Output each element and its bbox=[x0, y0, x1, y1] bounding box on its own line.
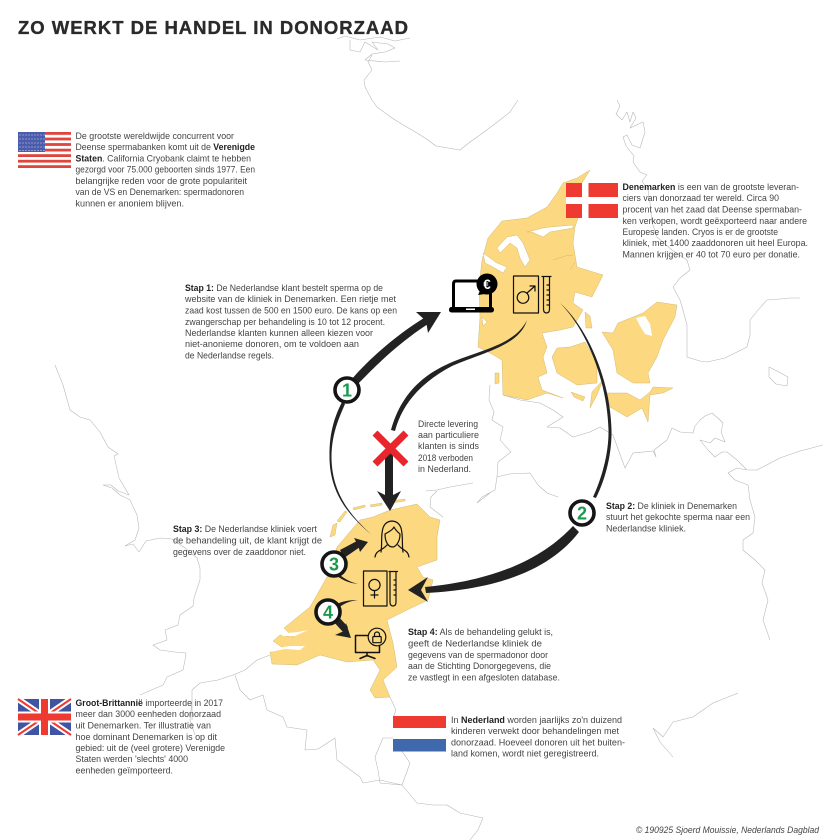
text: United States bbox=[76, 131, 255, 210]
text: step 4: ze vastlegt in een afgesloten database. bbox=[408, 672, 560, 684]
flag: Netherlands bbox=[393, 716, 446, 752]
text: step 4 bbox=[408, 627, 560, 684]
step 3 arrow bbox=[333, 538, 368, 584]
text: direct delivery ban bbox=[418, 419, 479, 475]
Jutland bbox=[478, 170, 603, 400]
text: direct delivery ban: in Nederland. bbox=[418, 464, 471, 475]
text: Netherlands bbox=[451, 715, 625, 760]
map: Denmark bbox=[478, 170, 677, 422]
text: step 2: Stap 2: De kliniek in Denemarken bbox=[606, 501, 737, 512]
text: Denmark: Europese landen. Cryos is er de grootste bbox=[622, 227, 778, 238]
text: step 1: Nederlandse klanten kunnen alleen kiezen voor bbox=[185, 328, 373, 339]
text: step 3 bbox=[173, 524, 322, 558]
text: United States: Staten. California Cryobank claimt te hebben bbox=[76, 154, 251, 164]
text: United States: De grootste wereldwijde concurrent voor bbox=[76, 131, 234, 142]
text: direct delivery ban: Directe levering bbox=[418, 419, 478, 430]
icon: laptop with euro bbox=[449, 274, 498, 312]
text: Denmark bbox=[622, 182, 808, 260]
text: step 2: Nederlandse kliniek. bbox=[606, 524, 686, 534]
text: United Kingdom: hoe dominant Denemarken is op dit bbox=[76, 732, 217, 743]
step 1 arrow bbox=[329, 312, 441, 535]
title: ZO WERKT DE HANDEL IN DONORZAAD bbox=[18, 17, 408, 38]
text: Denmark: ken verkopen, wordt geëxporteerd naar andere bbox=[622, 216, 807, 227]
text: Netherlands: kinderen verwekt door behandelingen met bbox=[451, 726, 619, 737]
text: United Kingdom: Groot-Brittannië importeerde in 2017 bbox=[76, 698, 223, 709]
text: United Kingdom: gebied: uit de (veel grotere) Verenigde bbox=[76, 743, 225, 754]
text: step 4: gegevens van de spermadonor door bbox=[408, 650, 548, 661]
text: United States: Deense spermabanken komt uit de Verenigde bbox=[76, 142, 255, 153]
map: Netherlands bbox=[270, 499, 440, 698]
text: United Kingdom bbox=[76, 698, 225, 776]
icon: monitor with lock bbox=[356, 628, 386, 658]
text: direct delivery ban: 2018 verboden bbox=[418, 453, 473, 464]
flag: United States bbox=[18, 132, 71, 168]
step badge 3: 3 bbox=[329, 554, 339, 574]
step badge 4: 4 bbox=[323, 602, 333, 622]
text: Netherlands: land komen, wordt niet geregistreerd. bbox=[451, 748, 599, 760]
text: Netherlands: In Nederland worden jaarlijks zo'n duizend bbox=[451, 715, 622, 726]
direct delivery arrow bbox=[377, 320, 527, 511]
icon: male donor file and test tube bbox=[514, 276, 551, 313]
small Danish islands bbox=[495, 312, 603, 408]
text: step 1: niet-anonieme donoren, om te voldoen aan bbox=[185, 339, 359, 350]
text: Denmark: Mannen krijgen er 40 tot 70 euro per donatie. bbox=[622, 250, 800, 260]
step badge 2 bbox=[570, 501, 594, 525]
Isefjord bbox=[636, 316, 652, 336]
text: step 2: stuurt het gekochte sperma naar een bbox=[606, 512, 750, 523]
text: United States: gezorgd voor 75.000 geboorten sinds 1977. Een bbox=[76, 164, 255, 176]
text: United States: kunnen er anoniem blijven. bbox=[76, 198, 184, 210]
step 4 arrow bbox=[332, 600, 358, 638]
text: step 3: gegevens over de zaaddonor niet. bbox=[173, 547, 306, 558]
text: Denmark: Denemarken is een van de grootste leveran- bbox=[622, 182, 799, 193]
icon: female file and test tube bbox=[364, 571, 398, 606]
Lolland and Falster bbox=[607, 387, 673, 422]
text: United Kingdom: Staten werden 'slechts' 4000 bbox=[76, 754, 188, 765]
Zealand bbox=[602, 302, 677, 383]
flag: Denmark bbox=[566, 183, 618, 218]
step badge 1: 1 bbox=[342, 380, 352, 400]
text: United Kingdom: eenheden geïmporteerd. bbox=[76, 766, 173, 776]
text: step 1: zwangerschap per behandeling is 10 tot 12 procent. bbox=[185, 317, 385, 328]
text: step 4: geeft de Nederlandse kliniek de bbox=[408, 638, 542, 650]
text: step 1: website van de kliniek in Denemarken. Een rietje met bbox=[184, 294, 396, 305]
icon: laptop with euro: € bbox=[483, 277, 491, 292]
Zeeland waterways bbox=[270, 630, 308, 652]
step badge 4 bbox=[316, 600, 340, 624]
flag: United Kingdom bbox=[18, 699, 71, 735]
text: United States: van de VS en Denemarken: spermadonoren bbox=[76, 187, 244, 198]
text: Denmark: ciers van donorzaad ter wereld. Circa 90 bbox=[622, 193, 779, 204]
step badge 1 bbox=[335, 378, 359, 402]
step badge 3 bbox=[322, 552, 346, 576]
text: step 4: aan de Stichting Donorgegevens, die bbox=[408, 661, 551, 672]
text: step 3: de behandeling uit, de klant krijgt de bbox=[173, 536, 322, 546]
text: direct delivery ban: aan particuliere bbox=[418, 430, 479, 441]
icon: woman bbox=[375, 521, 409, 557]
step 2 arrow bbox=[408, 303, 612, 602]
step badge 2: 2 bbox=[577, 504, 587, 524]
text: step 1: Stap 1: De Nederlandse klant bestelt sperma op de bbox=[185, 283, 383, 294]
text: step 3: Stap 3: De Nederlandse kliniek voert bbox=[173, 524, 317, 535]
text: step 1 bbox=[184, 283, 397, 362]
icon: red cross, direct delivery banned bbox=[375, 433, 406, 464]
text: Netherlands: donorzaad. Hoeveel donoren uit het buiten- bbox=[451, 738, 625, 748]
text: step 2 bbox=[606, 501, 750, 534]
Wadden islands bbox=[330, 499, 405, 537]
text: step 1: de Nederlandse regels. bbox=[185, 350, 274, 362]
text: step 1: zaad kost tussen de 500 en 1500 euro. De kans op een bbox=[185, 306, 397, 316]
text: United States: belangrijke reden voor de grote populariteit bbox=[76, 176, 247, 187]
text: direct delivery ban: klanten is sinds bbox=[418, 441, 479, 452]
text: Denmark: kliniek, met 1400 zaaddonoren uit heel Europa. bbox=[622, 238, 808, 249]
text: Denmark: procent van het zaad dat Deense spermaban- bbox=[622, 204, 802, 216]
Limfjord bbox=[482, 225, 575, 326]
text: step 4: Stap 4: Als de behandeling gelukt is, bbox=[408, 627, 553, 638]
text: United Kingdom: meer dan 3000 eenheden donorzaad bbox=[76, 709, 221, 720]
text: United Kingdom: uit Denemarken. Ter illustratie van bbox=[76, 720, 211, 732]
Funen bbox=[552, 342, 597, 385]
